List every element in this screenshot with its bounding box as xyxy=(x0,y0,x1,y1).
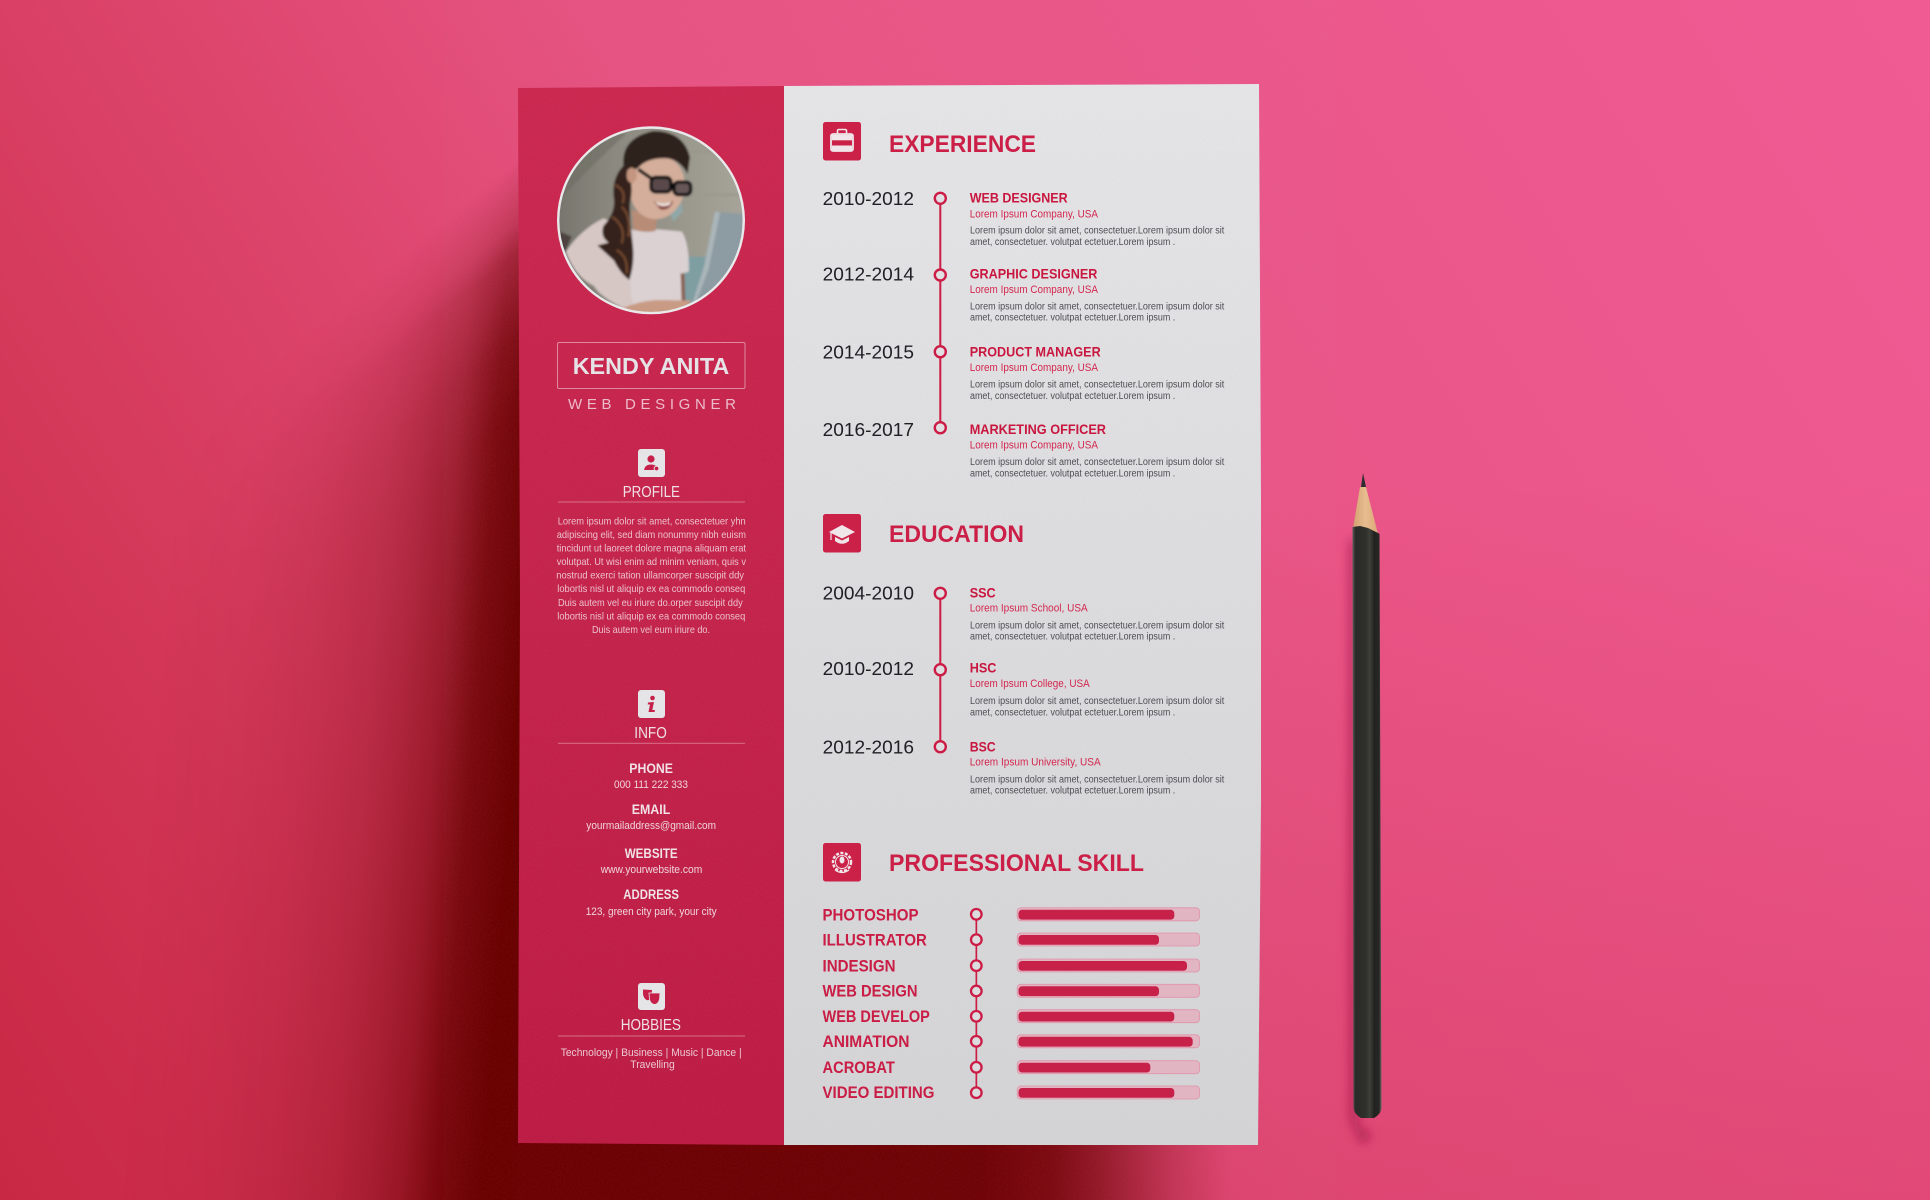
paper drop shadow xyxy=(224,175,1212,1200)
profile text: adipiscing elit, sed diam nonummy nibh euism xyxy=(557,530,746,541)
phone: 000 111 222 333 xyxy=(614,779,688,791)
school: hsc: 2010-2012 xyxy=(823,658,914,679)
name box: KENDY ANITA xyxy=(573,353,729,379)
skill labels xyxy=(822,906,934,1102)
profile text: tincidunt ut laoreet dolore magna aliquam erat xyxy=(557,543,746,554)
skill labels: WEB DEVELOP xyxy=(822,1008,930,1026)
info heading: INFO xyxy=(634,725,667,742)
section: experience xyxy=(823,122,1224,479)
pencil lead xyxy=(1361,473,1366,487)
skill bars xyxy=(1017,908,1200,1099)
school: bsc: BSC xyxy=(970,738,996,754)
pencil wood tip xyxy=(1353,487,1378,534)
education timeline xyxy=(935,588,946,752)
job: product manager: Lorem ipsum dolor sit amet, consectetuer.Lorem ipsum dolor sit xyxy=(970,380,1224,391)
photo ring xyxy=(558,128,744,313)
job: web designer: amet, consectetuer. volutpat ectetuer.Lorem ipsum . xyxy=(970,237,1175,248)
icon: gear xyxy=(823,843,861,882)
profile text: Duis autem vel eu iriure do.orper suscipit ddy xyxy=(558,598,743,609)
left panel xyxy=(518,86,784,1145)
hobbies text: Technology | Business | Music | Dance | xyxy=(561,1047,742,1059)
school: ssc: Lorem Ipsum School, USA xyxy=(970,602,1088,614)
job: graphic designer: Lorem Ipsum Company, USA xyxy=(970,284,1099,296)
hobbies text: Travelling xyxy=(630,1059,675,1071)
panel: info xyxy=(558,690,745,918)
role subtitle: WEB DESIGNER xyxy=(568,396,736,413)
job: product manager: Lorem Ipsum Company, USA xyxy=(970,362,1099,374)
website: WEBSITE xyxy=(625,846,678,861)
job: graphic designer: amet, consectetuer. volutpat ectetuer.Lorem ipsum . xyxy=(970,313,1175,324)
school: hsc: amet, consectetuer. volutpat ectetuer.Lorem ipsum . xyxy=(970,707,1175,718)
paper grain xyxy=(518,84,1261,1145)
hobbies heading: HOBBIES xyxy=(621,1017,681,1034)
job: graphic designer: 2012-2014 xyxy=(823,264,914,285)
job: marketing officer: Lorem Ipsum Company, USA xyxy=(970,440,1099,452)
skill labels: VIDEO EDITING xyxy=(822,1084,934,1102)
school: hsc xyxy=(823,658,1224,718)
job: marketing officer: amet, consectetuer. volutpat ectetuer.Lorem ipsum . xyxy=(970,468,1175,479)
job: web designer: WEB DESIGNER xyxy=(970,190,1068,206)
website xyxy=(600,846,702,876)
job: product manager: PRODUCT MANAGER xyxy=(970,344,1101,360)
hobbies text xyxy=(561,1047,742,1071)
name box xyxy=(558,342,745,388)
school: hsc: HSC xyxy=(970,660,996,676)
school: hsc: Lorem Ipsum College, USA xyxy=(970,678,1090,690)
panel: hobbies xyxy=(558,983,745,1071)
school: ssc: 2004-2010 xyxy=(823,582,914,603)
profile text xyxy=(556,516,747,636)
skill labels: ILLUSTRATOR xyxy=(822,932,927,950)
job: marketing officer: 2016-2017 xyxy=(823,419,914,440)
icon: graduation cap xyxy=(823,514,861,552)
icon: theatre masks xyxy=(638,983,665,1010)
email: EMAIL xyxy=(632,802,670,817)
profile text: Lorem ipsum dolor sit amet, consectetuer yhn xyxy=(558,516,746,527)
skill heading: PROFESSIONAL SKILL xyxy=(889,850,1144,877)
skill labels: INDESIGN xyxy=(822,958,896,976)
education heading: EDUCATION xyxy=(889,521,1024,548)
section: professional skill xyxy=(822,843,1200,1102)
job: graphic designer xyxy=(823,264,1224,324)
section: education xyxy=(823,514,1224,797)
school: ssc: amet, consectetuer. volutpat ectetuer.Lorem ipsum . xyxy=(970,632,1175,643)
resume paper xyxy=(784,84,1261,1145)
pencil body xyxy=(1352,526,1382,1118)
job: product manager: 2014-2015 xyxy=(823,342,914,362)
school: bsc xyxy=(823,736,1224,797)
profile text: lobortis nisl ut aliquip ex ea commodo conseq xyxy=(557,611,745,622)
address xyxy=(586,887,717,918)
profile text: Duis autem vel eum iriure do. xyxy=(592,625,710,636)
email: yourmailaddress@gmail.com xyxy=(586,820,716,832)
pencil shadow xyxy=(1349,540,1372,1145)
school: ssc: Lorem ipsum dolor sit amet, consectetuer.Lorem ipsum dolor sit xyxy=(970,620,1224,631)
skill labels: ANIMATION xyxy=(822,1033,910,1051)
job: graphic designer: GRAPHIC DESIGNER xyxy=(970,265,1097,281)
profile photo xyxy=(559,128,743,312)
panel: profile xyxy=(556,449,747,636)
skill labels: WEB DESIGN xyxy=(822,983,918,1001)
school: ssc: SSC xyxy=(970,584,996,600)
icon: profile xyxy=(638,449,665,477)
skill connector xyxy=(971,909,982,1098)
job: marketing officer xyxy=(823,419,1224,479)
school: bsc: 2012-2016 xyxy=(823,736,914,757)
phone xyxy=(614,761,688,791)
website: www.yourwebsite.com xyxy=(600,864,702,876)
pencil xyxy=(1349,473,1382,1145)
address: 123, green city park, your city xyxy=(586,906,717,918)
icon: info xyxy=(638,690,665,718)
profile text: lobortis nisl ut aliquip ex ea commodo conseq xyxy=(557,584,745,595)
job: marketing officer: Lorem ipsum dolor sit amet, consectetuer.Lorem ipsum dolor sit xyxy=(970,457,1224,468)
job: web designer: Lorem Ipsum Company, USA xyxy=(970,208,1099,220)
school: hsc: Lorem ipsum dolor sit amet, consectetuer.Lorem ipsum dolor sit xyxy=(970,696,1224,707)
skill labels: ACROBAT xyxy=(822,1059,895,1077)
profile text: nostrud exerci tation ullamcorper suscipit ddy xyxy=(556,571,745,582)
job: web designer: 2010-2012 xyxy=(823,188,914,209)
profile heading: PROFILE xyxy=(623,484,680,501)
school: bsc: amet, consectetuer. volutpat ectetuer.Lorem ipsum . xyxy=(970,786,1175,797)
job: web designer: Lorem ipsum dolor sit amet, consectetuer.Lorem ipsum dolor sit xyxy=(970,226,1224,237)
icon: briefcase xyxy=(823,122,861,160)
job: web designer xyxy=(823,188,1224,248)
school: bsc: Lorem Ipsum University, USA xyxy=(970,756,1101,768)
profile text: volutpat. Ut wisi enim ad minim veniam, quis v xyxy=(557,557,747,568)
job: product manager xyxy=(823,342,1224,402)
school: bsc: Lorem ipsum dolor sit amet, consectetuer.Lorem ipsum dolor sit xyxy=(970,774,1224,785)
address: ADDRESS xyxy=(623,887,679,902)
experience timeline xyxy=(935,193,946,433)
experience heading: EXPERIENCE xyxy=(889,131,1036,158)
phone: PHONE xyxy=(629,761,673,776)
skill labels: PHOTOSHOP xyxy=(822,906,918,924)
job: graphic designer: Lorem ipsum dolor sit amet, consectetuer.Lorem ipsum dolor sit xyxy=(970,301,1224,312)
job: product manager: amet, consectetuer. volutpat ectetuer.Lorem ipsum . xyxy=(970,391,1175,402)
email xyxy=(586,802,716,832)
school: ssc xyxy=(823,582,1224,643)
job: marketing officer: MARKETING OFFICER xyxy=(970,421,1106,437)
